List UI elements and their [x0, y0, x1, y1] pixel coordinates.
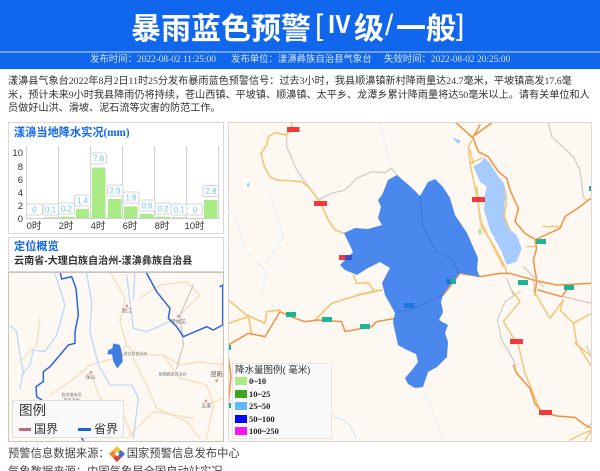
bar chart: precipitation: 6 — [18, 175, 23, 186]
bar chart: precipitation: 1.8 — [125, 194, 137, 202]
data source: warning information: 预警信息数据来源： 国家预警信息发布中心 — [8, 448, 240, 460]
bar chart: precipitation: 10 — [12, 148, 23, 159]
main warning map — [228, 122, 592, 442]
bar chart: precipitation: 0.2 — [157, 204, 169, 214]
bottom-right quadrant roads — [423, 290, 592, 440]
locator map: 保山 — [86, 374, 96, 381]
bar chart: precipitation: 0 — [193, 206, 198, 214]
bar chart: precipitation: 1.4 — [77, 196, 89, 206]
locator map: 大理白族自治州 — [119, 350, 147, 356]
panel heading: location: 定位概览 — [14, 241, 59, 253]
issue information: 失效时间：2022-08-02 20:25:00 — [384, 55, 510, 65]
panel: local precipitation — [8, 122, 224, 234]
legend: provincial border: 省界 — [94, 422, 118, 436]
legend rows: 0~10 — [249, 376, 266, 386]
legend: national border: 国界 — [34, 422, 58, 436]
legend rows: 100~250 — [249, 426, 279, 436]
bar chart: precipitation: 0 — [18, 214, 23, 225]
locator map: 攀枝花 — [171, 318, 186, 325]
title: 一般 — [396, 4, 456, 48]
locator map: 临沧傣族佤 — [62, 391, 82, 397]
warning description: 漾濞县气象台2022年8月2日11时25分发布暴雨蓝色预警信号：过去3小时，我县顺濞镇新村降雨量达24.7毫米，平坡镇高发17.6毫 — [8, 76, 572, 87]
road shield labels — [228, 127, 592, 415]
bar chart: precipitation: 2时 — [59, 220, 74, 232]
title: [ — [315, 9, 323, 42]
bar chart: precipitation: 8时 — [155, 220, 170, 232]
bar chart: precipitation: 0.1 — [173, 206, 185, 214]
bar chart: precipitation: 10时 — [184, 220, 205, 232]
panel heading: precipitation: 漾濞当地降水实况(mm) — [14, 127, 130, 139]
title: ] — [456, 9, 464, 42]
issue information: 发布单位：漾濞彝族自治县气象台 — [231, 55, 372, 65]
header banner — [0, 0, 600, 69]
bar chart: precipitation: 2.9 — [109, 186, 121, 196]
locator map: 丽江 — [122, 307, 132, 314]
locator map: 楚雄彝族自治州 — [159, 371, 187, 377]
locator map: 族自治州 — [64, 396, 80, 402]
legend rows: 25~50 — [249, 401, 270, 411]
locator map: 昆明 — [211, 371, 223, 378]
issue information — [90, 54, 510, 65]
title: Ⅳ — [327, 12, 351, 39]
legend title: 图例 — [19, 403, 46, 418]
bar chart: precipitation: 0.6 — [141, 202, 153, 210]
bar chart: precipitation: 0时 — [27, 220, 42, 232]
legend title: rainfall: 降水量图例( 毫米) — [235, 365, 310, 376]
title — [131, 4, 464, 48]
administrative path: 云南省-大理白族自治州-漾濞彝族自治县 — [14, 256, 192, 267]
warning area: Yangbi county — [340, 175, 480, 388]
bar chart: precipitation: 0.2 — [61, 204, 73, 214]
icon: warning centre logo — [109, 446, 125, 462]
bar chart: precipitation: 4时 — [91, 220, 106, 232]
title: 暴雨蓝色预警 — [131, 4, 311, 48]
title: 级 — [354, 4, 384, 48]
map legend — [12, 400, 124, 438]
locator map — [8, 272, 224, 442]
legend rows: 50~100 — [249, 414, 275, 424]
bar chart: precipitation: 8 — [18, 162, 23, 173]
top-right quadrant roads and lake — [443, 122, 592, 295]
legend rows — [235, 376, 279, 436]
title: / — [385, 9, 393, 42]
locator map: 玉溪 — [201, 403, 211, 410]
bar chart: precipitation: 0 — [32, 206, 37, 214]
warning description — [8, 75, 590, 114]
bar chart: precipitation: 4 — [18, 188, 23, 199]
bar chart: precipitation: 7.8 — [93, 154, 105, 164]
rainfall legend — [232, 363, 332, 439]
bottom-left quadrant roads — [228, 290, 405, 438]
issue information: 发布时间：2022-08-02 11:25:00 — [90, 55, 216, 65]
warning description: 米，预计未来9小时我县降雨仍将持续，苍山西镇、平坡镇、顺濞镇、太平乡、龙潭乡累计降雨量将达50毫米以上。请有关单位和人 — [8, 90, 590, 100]
bar chart: precipitation: 0.1 — [45, 206, 57, 214]
top-left quadrant roads — [229, 122, 397, 295]
bar chart: precipitation: 2.8 — [205, 187, 217, 196]
warning description: 员做好山洪、滑坡、泥石流等灾害的防范工作。 — [8, 103, 221, 114]
bar chart: precipitation: 6时 — [123, 220, 138, 232]
panel: location overview — [8, 237, 224, 272]
legend rows: 10~25 — [249, 389, 270, 399]
bar chart: precipitation: 2 — [18, 201, 23, 212]
divider line — [0, 51, 600, 53]
